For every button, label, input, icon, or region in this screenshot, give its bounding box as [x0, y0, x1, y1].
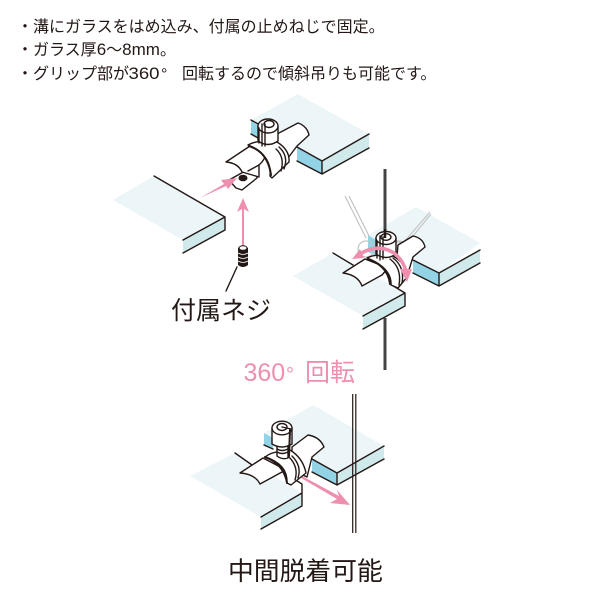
label: 360 degree rotation: °: [286, 364, 294, 386]
arrow: rotation: [352, 248, 412, 282]
icon: set screw: [238, 246, 248, 267]
label: mid-span attachable: 中間脱着可能: [228, 557, 383, 586]
label: 360 degree rotation: 360: [244, 359, 285, 387]
left glass panel: [190, 453, 302, 529]
arrow: screw upward: [237, 198, 249, 247]
arrow: to screw hole: [200, 178, 237, 198]
rod: [384, 169, 386, 370]
diagram: rotation: [293, 169, 480, 370]
diagram: mid-span attachment: [190, 394, 384, 533]
feature list: [17, 18, 436, 83]
feature list: 360: [128, 64, 160, 83]
feature list: ・ガラス厚6～8mm。: [17, 40, 176, 59]
label: included screw: 付属ネジ: [171, 297, 271, 325]
feature list: ・グリップ部が: [17, 66, 129, 83]
grip clamp: [226, 119, 309, 190]
right glass panel: [368, 207, 480, 286]
grip clamp: [240, 421, 324, 485]
feature list: °: [161, 66, 167, 83]
double line rod: [353, 394, 356, 533]
feature list: ・溝にガラスをはめ込み、付属の止めねじで固定。: [17, 18, 385, 36]
feature list: 回転するので傾斜吊りも可能です。: [182, 65, 436, 83]
left glass panel: [113, 176, 225, 253]
ghost rotation positions: [345, 196, 431, 262]
right glass panel: [251, 94, 369, 174]
right glass panel: [264, 405, 384, 485]
arrow: attach to rod: [301, 476, 350, 505]
leader line: [226, 267, 237, 291]
grip clamp: [343, 229, 425, 288]
label: 360 degree rotation: [244, 359, 355, 387]
label: 360 degree rotation: 回転: [305, 359, 355, 387]
diagram: screw fitting: [113, 94, 369, 325]
left glass panel: [293, 253, 405, 329]
